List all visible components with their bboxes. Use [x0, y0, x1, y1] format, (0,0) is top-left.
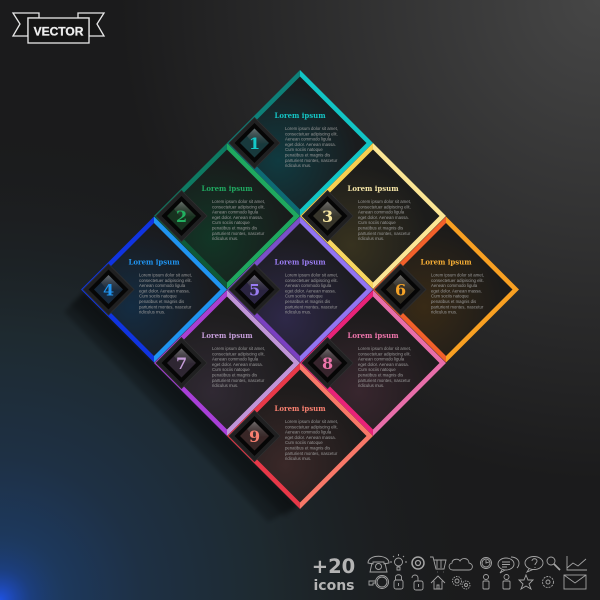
panel 5: [227, 216, 373, 362]
panel 3: Aenean commodo ligula: [358, 210, 405, 215]
panel 1: consectetuer adipiscing elit.: [285, 131, 338, 136]
panel 6: Cum sociis natoque: [431, 294, 469, 299]
badge 8: 8: [322, 354, 333, 373]
icon: shopping cart: [430, 557, 446, 572]
icon: key: [369, 576, 388, 588]
panel 2: consectetuer adipiscing elit.: [212, 204, 265, 209]
panel 7: penatibus et magnis dis: [212, 372, 257, 378]
panel 1: penatibus et magnis dis: [285, 152, 330, 158]
icon: telephone: [368, 556, 389, 572]
panel 2: [154, 143, 300, 289]
panel 3: Lorem ipsum: [347, 184, 399, 193]
panel 8: eget dolor. Aenean massa.: [358, 362, 409, 367]
panel 3: Lorem ipsum dolor sit amet,: [358, 199, 411, 204]
panel 2: parturient montes, nascetur: [212, 231, 265, 236]
panel 4: Lorem ipsum: [128, 258, 180, 266]
badge 1: 1: [249, 134, 260, 153]
panel 7: Aenean commodo ligula: [212, 357, 259, 362]
panel 5: penatibus et magnis dis: [285, 299, 330, 304]
panel 2: Aenean commodo ligula: [212, 210, 259, 215]
badge 9: 9: [249, 427, 260, 446]
badge 2: [156, 190, 207, 242]
icon: question bubble: [525, 556, 543, 572]
panel 7: consectetuer adipiscing elit.: [212, 351, 265, 356]
panel 8: Cum sociis natoque: [358, 367, 396, 372]
panel 6: [373, 216, 519, 362]
panel 9: parturient montes, nascetur: [285, 451, 338, 456]
panel 4: ridiculus mus.: [139, 310, 165, 315]
icon: speech bubbles: [498, 557, 519, 573]
panel 6: Aenean commodo ligula: [431, 283, 478, 288]
badge 3: [302, 190, 353, 242]
panel 6: eget dolor. Aenean massa.: [431, 288, 482, 293]
icons caption: [312, 555, 355, 594]
panel 7: Lorem ipsum dolor sit amet,: [212, 346, 265, 351]
panel 4: penatibus et magnis dis: [139, 299, 184, 304]
icon: line chart: [567, 556, 587, 570]
panel 9: penatibus et magnis dis: [285, 446, 330, 450]
badge 9: [229, 410, 280, 462]
badge 8: [302, 338, 353, 388]
panel 4: Aenean commodo ligula: [139, 283, 186, 288]
panel 2: eget dolor. Aenean massa.: [212, 215, 263, 220]
panel 6: penatibus et magnis dis: [431, 299, 476, 304]
panel 9: eget dolor. Aenean massa.: [285, 435, 336, 440]
panel 5: consectetuer adipiscing elit.: [285, 278, 338, 283]
icon set: [368, 554, 587, 590]
panel 6: Lorem ipsum: [420, 258, 472, 266]
icon: person one: [483, 574, 489, 589]
icon: gears: [452, 576, 470, 589]
panel 7: Lorem ipsum: [201, 331, 253, 340]
panel 5: Cum sociis natoque: [285, 294, 323, 299]
ribbon: vector badge: VECTOR: [34, 24, 84, 38]
badge 5: 5: [249, 280, 260, 300]
panel 1: ridiculus mus.: [285, 163, 311, 168]
panel 5: eget dolor. Aenean massa.: [285, 288, 336, 293]
icon: clock: [480, 558, 492, 568]
panel 4: eget dolor. Aenean massa.: [139, 288, 190, 293]
ribbon: vector badge: [13, 13, 104, 43]
badge 3: 3: [322, 207, 333, 226]
icon: star: [519, 575, 533, 589]
panel 4: consectetuer adipiscing elit.: [139, 278, 192, 283]
panel 6: consectetuer adipiscing elit.: [431, 278, 484, 283]
panel 7: eget dolor. Aenean massa.: [212, 362, 263, 367]
panel 2: Lorem ipsum dolor sit amet,: [212, 199, 265, 204]
icon: cloud: [449, 559, 472, 570]
panel 6: ridiculus mus.: [431, 310, 457, 315]
badge 2: 2: [176, 207, 187, 226]
panel 4: [81, 216, 227, 362]
panel 3: ridiculus mus.: [358, 236, 384, 241]
panel 1: Lorem ipsum dolor sit amet,: [285, 126, 338, 131]
icon: light bulb: [390, 554, 407, 570]
drop shadow under diagram: [64, 292, 298, 522]
panel 1: parturient montes, nascetur: [285, 158, 338, 163]
panel 3: consectetuer adipiscing elit.: [358, 204, 411, 209]
icon: envelope: [564, 575, 586, 589]
panel 4: Cum sociis natoque: [139, 294, 177, 299]
panel 9: Lorem ipsum: [274, 404, 326, 413]
badge 5: [229, 264, 280, 315]
panel 5: parturient montes, nascetur: [285, 304, 338, 309]
badge 1: [229, 118, 280, 168]
badge 7: 7: [176, 354, 187, 373]
icon: at sign: [412, 557, 424, 569]
panel 6: Lorem ipsum dolor sit amet,: [431, 272, 484, 278]
icon: closed padlock: [394, 575, 403, 589]
panel 9: consectetuer adipiscing elit.: [285, 424, 338, 429]
panel 3: [300, 143, 446, 289]
panel 4: Lorem ipsum dolor sit amet,: [139, 272, 192, 278]
icon: house: [431, 576, 445, 589]
badge 6: [375, 264, 426, 315]
panel 9: ridiculus mus.: [285, 456, 311, 461]
panel 2: Lorem ipsum: [201, 184, 253, 193]
panel 5: ridiculus mus.: [285, 310, 311, 315]
panel 5: Aenean commodo ligula: [285, 283, 332, 288]
panel 8: parturient montes, nascetur: [358, 378, 411, 383]
panel 1: Cum sociis natoque: [285, 147, 323, 152]
badge 7: [156, 338, 207, 388]
icon: person two: [503, 574, 510, 589]
panel 9: Cum sociis natoque: [285, 440, 323, 445]
panel 6: parturient montes, nascetur: [431, 304, 484, 309]
panel 5: Lorem ipsum: [274, 258, 326, 266]
panel 1: [227, 70, 373, 216]
panel 7: [154, 290, 300, 436]
panel 1: Lorem ipsum: [274, 111, 326, 120]
panel 8: ridiculus mus.: [358, 383, 384, 388]
panel 3: penatibus et magnis dis: [358, 226, 403, 230]
panel 8: consectetuer adipiscing elit.: [358, 351, 411, 356]
panel 2: Cum sociis natoque: [212, 220, 250, 225]
panel 5: Lorem ipsum dolor sit amet,: [285, 272, 338, 278]
panel 7: parturient montes, nascetur: [212, 378, 265, 383]
icon: magnifier: [547, 557, 560, 570]
panel 3: Cum sociis natoque: [358, 220, 396, 225]
panel 1: Aenean commodo ligula: [285, 137, 332, 142]
badge 6: 6: [395, 280, 406, 300]
panel 8: [300, 290, 446, 436]
panel 3: eget dolor. Aenean massa.: [358, 215, 409, 220]
panel 2: penatibus et magnis dis: [212, 226, 257, 230]
icons caption: +20: [312, 555, 355, 578]
panel 2: ridiculus mus.: [212, 236, 238, 241]
icon: open padlock: [412, 575, 423, 590]
badge 4: [83, 264, 134, 315]
panel 7: Cum sociis natoque: [212, 367, 250, 372]
panel 8: Aenean commodo ligula: [358, 357, 405, 362]
panel 7: ridiculus mus.: [212, 383, 238, 388]
panel 9: Lorem ipsum dolor sit amet,: [285, 419, 338, 424]
panel 8: Lorem ipsum: [347, 331, 399, 340]
panel 8: Lorem ipsum dolor sit amet,: [358, 346, 411, 351]
panel 1: eget dolor. Aenean massa.: [285, 142, 336, 147]
panel 4: parturient montes, nascetur: [139, 304, 192, 309]
panel 9: [227, 363, 373, 509]
icon: gear badge: [542, 576, 554, 588]
icons caption: icons: [313, 578, 355, 594]
panel 3: parturient montes, nascetur: [358, 231, 411, 236]
badge 4: 4: [103, 280, 114, 300]
panel 8: penatibus et magnis dis: [358, 372, 403, 378]
panel 9: Aenean commodo ligula: [285, 430, 332, 435]
